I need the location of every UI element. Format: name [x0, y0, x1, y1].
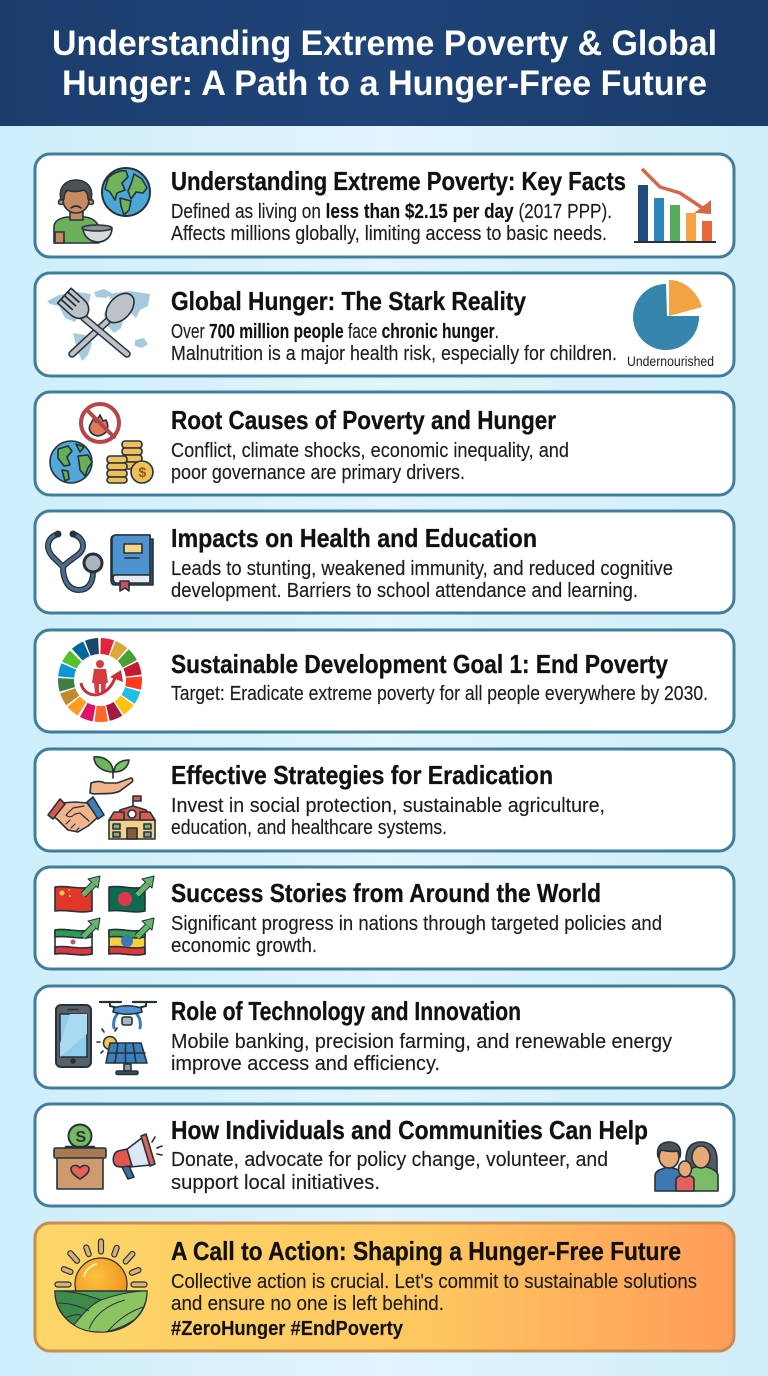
body text: development. Barriers to school attendance and learning. [171, 580, 638, 602]
body text [171, 201, 612, 245]
body text: Mobile banking, precision farming, and renewable energy [171, 1031, 672, 1053]
body text: Target: Eradicate extreme poverty for all people everywhere by 2030. [171, 683, 708, 705]
body text: poor governance are primary drivers. [171, 462, 465, 484]
body text [171, 440, 569, 484]
body text [171, 795, 605, 839]
panel: root causes [35, 392, 734, 495]
pie chart: undernourished: Undernourished [627, 353, 714, 369]
icon: conflict, globe and coins: $ [138, 464, 146, 480]
icon: family [655, 1142, 718, 1191]
body text: support local initiatives. [171, 1172, 380, 1194]
title banner: Hunger: A Path to a Hunger-Free Future [62, 64, 707, 103]
body text: economic growth. [171, 935, 317, 957]
body text [171, 1149, 608, 1194]
body text [171, 1031, 672, 1075]
icon: donation box and megaphone: S [76, 1129, 86, 1146]
icon: donation box and megaphone [54, 1124, 162, 1189]
body text: Leads to stunting, weakened immunity, and reduced cognitive [171, 558, 673, 580]
icon: fork and spoon over world map [47, 288, 150, 361]
body text: Conflict, climate shocks, economic inequality, and [171, 440, 569, 462]
panel: call to action [35, 1223, 734, 1351]
bar chart with falling arrow [634, 169, 716, 243]
body text [171, 913, 662, 957]
body text: Collective action is crucial. Let's commit to sustainable solutions [171, 1271, 697, 1293]
panel: success stories [35, 867, 734, 969]
body text: Invest in social protection, sustainable agriculture, [171, 795, 605, 817]
icon: seedling, handshake and school [48, 757, 155, 839]
icon: sun rising over fields [55, 1239, 147, 1332]
panel: how to help [35, 1104, 734, 1206]
heading: Sustainable Development Goal 1: End Poverty [171, 649, 668, 679]
icon: stethoscope and book [48, 530, 153, 591]
body text: Donate, advocate for policy change, volunteer, and [171, 1149, 608, 1171]
heading: Understanding Extreme Poverty: Key Facts [171, 166, 626, 196]
panel: key facts [35, 154, 734, 257]
heading: Root Causes of Poverty and Hunger [171, 405, 556, 435]
body text [171, 558, 673, 602]
body text: and ensure no one is left behind. [171, 1293, 444, 1315]
heading: How Individuals and Communities Can Help [171, 1115, 648, 1145]
heading: Effective Strategies for Eradication [171, 760, 553, 790]
body text [171, 1271, 697, 1315]
panel: technology [35, 986, 734, 1088]
body text: education, and healthcare systems. [171, 817, 447, 839]
title banner: Understanding Extreme Poverty & Global [52, 24, 717, 63]
body text: Over 700 million people face chronic hunger. [171, 321, 499, 343]
heading: Impacts on Health and Education [171, 523, 537, 553]
body text [171, 321, 617, 365]
pie chart: undernourished [627, 280, 714, 369]
body text: Affects millions globally, limiting access to basic needs. [171, 223, 607, 245]
icon: conflict, globe and coins [50, 404, 153, 483]
hashtags: #ZeroHunger #EndPoverty [171, 1318, 404, 1340]
body text: Significant progress in nations through targeted policies and [171, 913, 662, 935]
body text: Defined as living on less than $2.15 per day (2017 PPP). [171, 201, 612, 223]
heading: Global Hunger: The Stark Reality [171, 286, 526, 316]
heading: Role of Technology and Innovation [171, 996, 521, 1026]
panel: SDG 1 [35, 630, 734, 732]
body text: improve access and efficiency. [171, 1053, 440, 1075]
icon: phone, drone and solar panel [56, 1002, 156, 1074]
icon: four flags with rising arrows [55, 876, 154, 955]
heading: Success Stories from Around the World [171, 878, 601, 908]
panel: strategies [35, 749, 734, 851]
icon: hungry person with bowl and globe [54, 168, 150, 243]
icon: SDG colour wheel with person [52, 632, 148, 728]
panel: health and education [35, 511, 734, 613]
body text: Malnutrition is a major health risk, especially for children. [171, 343, 617, 365]
title banner [0, 0, 768, 126]
panel: global hunger [35, 273, 734, 376]
heading: A Call to Action: Shaping a Hunger-Free Future [171, 1236, 681, 1266]
